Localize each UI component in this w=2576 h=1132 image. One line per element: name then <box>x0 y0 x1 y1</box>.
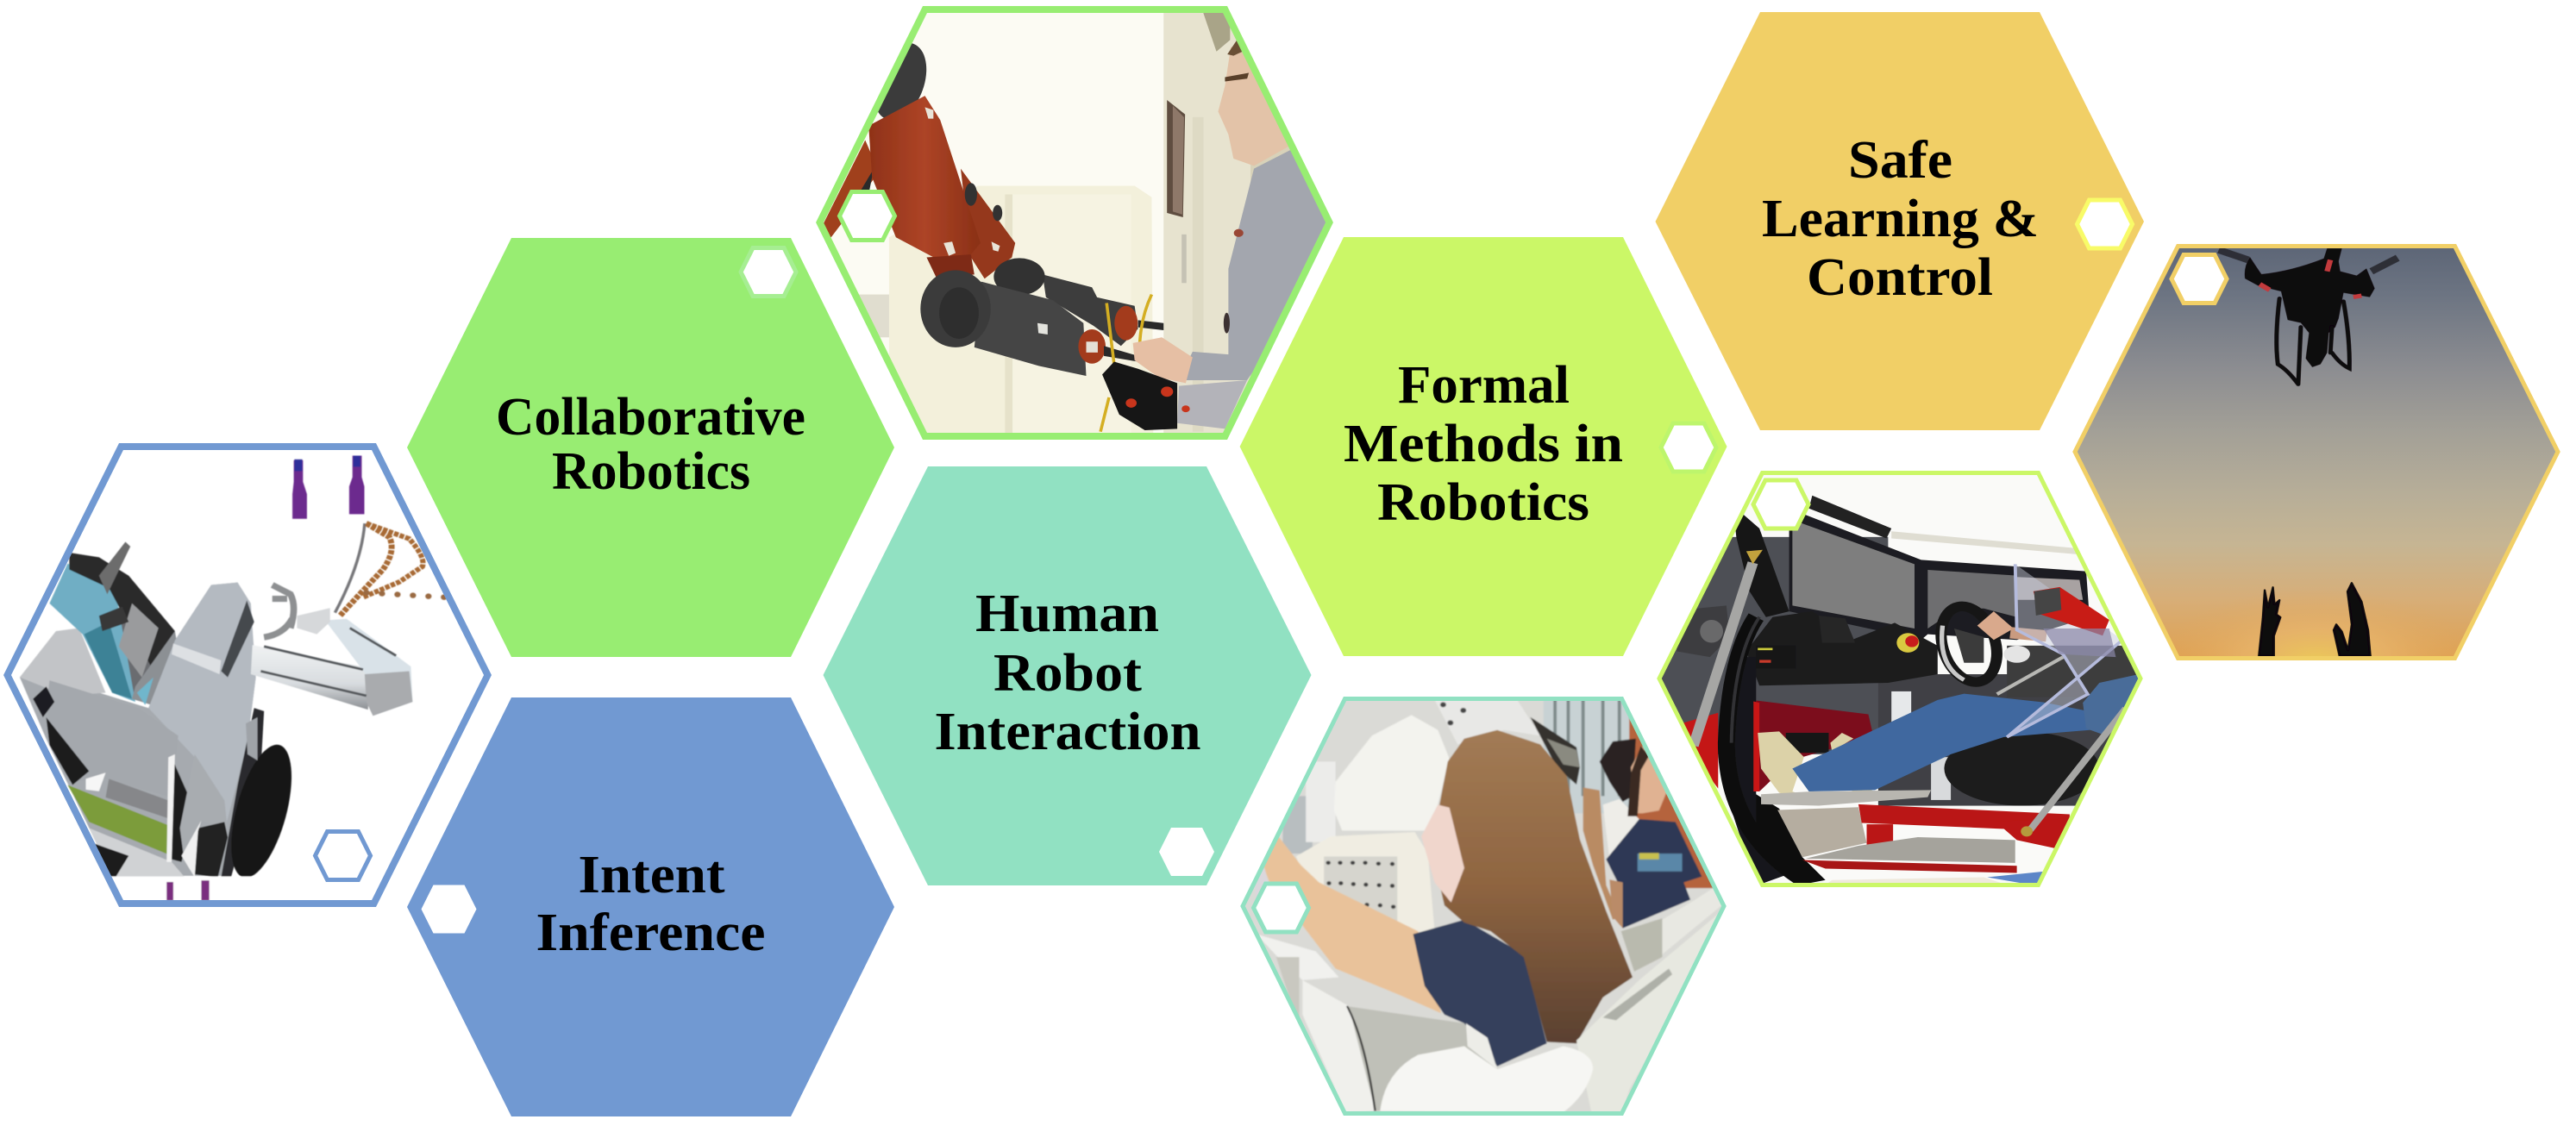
hands <box>2259 583 2371 656</box>
pedal box <box>1683 713 1718 789</box>
frame <box>1735 515 1789 617</box>
shield <box>2007 564 2122 737</box>
label: Safe Learning & Control: Control <box>1807 248 1993 307</box>
label: Human Robot Interaction: Human <box>975 585 1159 643</box>
shirt <box>1413 920 1547 1066</box>
photo: drone and raised hands <box>2070 244 2561 661</box>
photo: driver in simulator rig <box>1661 495 2139 883</box>
label: Collaborative Robotics: Robotics <box>552 442 750 501</box>
robot arm <box>878 43 926 117</box>
icon: small white hexagon <box>1159 828 1214 876</box>
panel: drone at sunset photo <box>2070 244 2561 661</box>
icon: small white hexagon <box>2077 200 2132 248</box>
hexagon: blue tile <box>407 697 894 1116</box>
jeans <box>1792 694 2091 791</box>
gripper arm back <box>1043 274 1138 346</box>
monitors <box>1789 509 2090 640</box>
lower robot <box>1345 1006 1497 1111</box>
hexagon border: gold <box>2075 247 2558 659</box>
label: Safe Learning & Control: Learning & <box>1762 190 2039 248</box>
photo: mobile robot with bottles <box>19 455 447 900</box>
white blob <box>1380 1047 1593 1112</box>
head <box>1334 715 1450 830</box>
panel: driving simulator photo <box>1657 471 2143 887</box>
cables <box>1727 617 1799 877</box>
rods <box>1694 563 1752 746</box>
panel: student with humanoid robot photo <box>1240 697 1727 1116</box>
label: Human Robot Interaction: Interaction <box>935 703 1200 761</box>
icon: small outlined hexagon <box>316 831 371 879</box>
shoes <box>1758 731 1804 793</box>
icon: small outlined hexagon <box>1254 884 1309 932</box>
arm <box>1263 834 1441 1013</box>
seat <box>1944 731 2099 806</box>
icon: small outlined hexagon <box>840 191 895 240</box>
label: Intent Inference: Intent <box>578 846 725 904</box>
hair <box>1432 730 1633 1043</box>
cables <box>1100 295 1151 432</box>
panel: Human Robot Interaction <box>823 466 1311 885</box>
label: Human Robot Interaction: Robot <box>993 644 1142 703</box>
label: Formal Methods in Robotics <box>1344 356 1623 532</box>
icon: small white hexagon <box>1661 423 1716 472</box>
wheel <box>1933 601 2005 687</box>
panel: Formal Methods in Robotics <box>1240 237 1727 656</box>
photo: student and white robot <box>1245 701 1721 1111</box>
label: Collaborative Robotics: Collaborative <box>496 388 805 447</box>
hexagon: gold tile <box>1656 12 2144 430</box>
right panels <box>1621 918 1663 972</box>
label: Formal Methods in Robotics: Methods in <box>1344 415 1623 473</box>
label: Safe Learning & Control <box>1762 131 2039 307</box>
panel: human handing tool to robot arm photo <box>811 0 1353 448</box>
arm <box>251 645 370 710</box>
bottles <box>292 460 307 519</box>
label: Formal Methods in Robotics: Robotics <box>1377 473 1589 532</box>
hexagon: teal tile <box>823 466 1311 885</box>
hexagon border: lime <box>1659 472 2140 885</box>
hexagon: green tile <box>407 238 894 657</box>
panel: Collaborative Robotics <box>407 238 894 657</box>
background people <box>1530 717 1580 785</box>
trajectory <box>335 523 365 613</box>
label: Safe Learning & Control: Safe <box>1848 131 1952 190</box>
panel: mobile manipulator render <box>0 440 496 910</box>
icon: small outlined hexagon <box>2172 255 2227 303</box>
label: Human Robot Interaction <box>935 585 1200 761</box>
panel: Intent Inference <box>407 697 894 1116</box>
photo: person with red robot arm <box>824 13 1326 433</box>
label: Formal Methods in Robotics: Formal <box>1398 356 1570 415</box>
icon: small outlined hexagon <box>1753 480 1808 528</box>
label: Intent Inference: Inference <box>536 904 766 962</box>
picture frame <box>1167 100 1185 217</box>
icon: small white hexagon <box>421 885 476 933</box>
hexagon border: blue <box>7 447 488 904</box>
drone <box>2245 248 2375 367</box>
base <box>1761 790 1931 806</box>
panel: Safe Learning & Control <box>1656 12 2144 430</box>
hexagon border: green <box>819 9 1330 436</box>
hexagon: lime tile <box>1240 237 1727 656</box>
man <box>1179 148 1329 380</box>
icon: small white hexagon <box>741 248 796 297</box>
label: Intent Inference <box>536 846 766 962</box>
label: Collaborative Robotics <box>496 388 805 501</box>
hexagon border: teal <box>1243 698 1724 1114</box>
